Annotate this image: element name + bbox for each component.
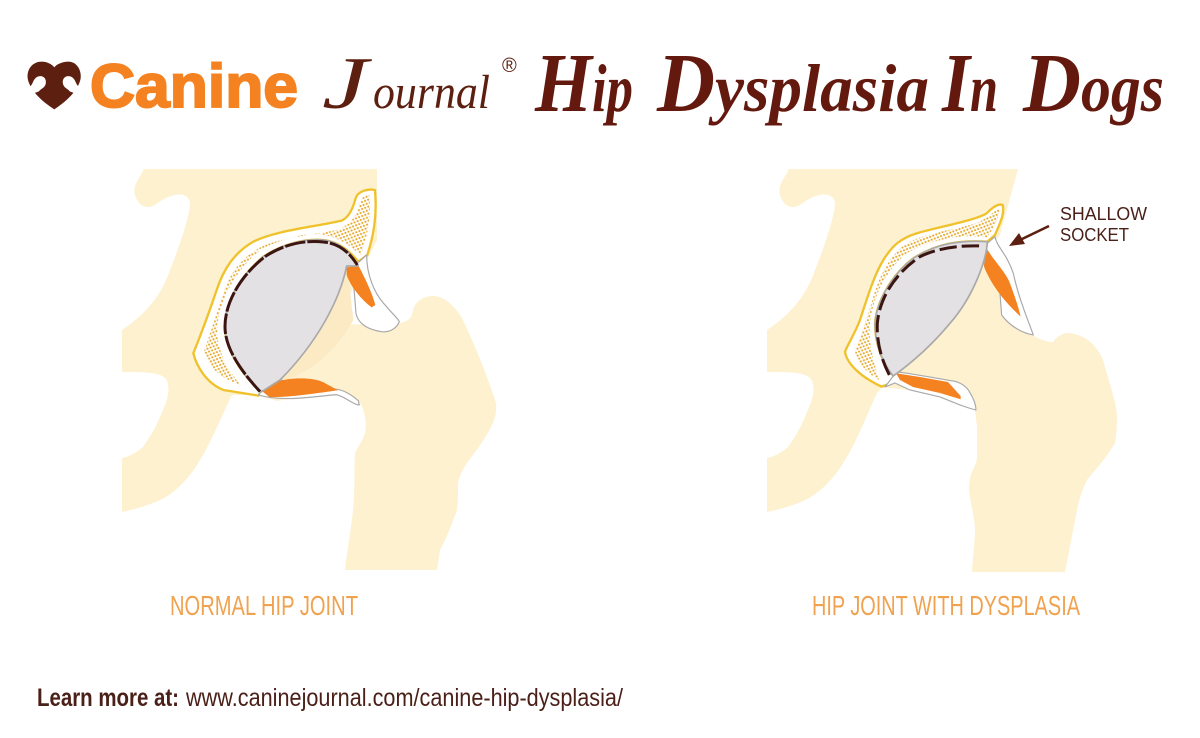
callout: shallow socket: SHALLOW [1060,204,1147,224]
socket and joint detail [845,205,1033,410]
label: hip joint with dysplasia: HIP JOINT WITH DYSPLASIA [812,590,1080,621]
callout: shallow socket [1060,204,1147,245]
orange upper ligament [984,248,1021,317]
orange lower ligament [263,378,338,397]
logo [28,43,517,125]
femoral head [875,241,987,376]
panel: hip joint with dysplasia [767,169,1117,572]
upper capsule [347,255,399,332]
title: ip [592,50,633,126]
orange lower ligament [896,373,961,399]
footer link text [37,684,623,712]
lower capsule [258,380,359,405]
acetabulum cartilage outline [845,205,1003,387]
logo word: Journal: ournal [373,66,490,119]
title: n [970,50,998,126]
footer link text: Learn more at: [37,684,179,712]
registered mark: ® [502,55,517,77]
upper capsule [984,237,1033,335]
arrow: shallow socket [1009,226,1049,246]
femoral head shadow [280,267,353,380]
lower capsule [885,372,976,410]
pelvis bone [122,169,377,512]
orange upper ligament [347,265,375,307]
socket and joint detail [193,190,399,405]
femoral head [225,240,358,392]
label: normal hip joint: NORMAL HIP JOINT [170,590,358,621]
dashed cartilage line [877,246,982,375]
title: D [656,37,715,130]
femur bone [258,296,496,570]
title: ysplasia [708,50,929,126]
title: ogs [1081,50,1164,126]
stippled bone [855,208,999,380]
acetabulum cartilage outline [193,190,376,396]
footer link text: www.caninejournal.com/canine-hip-dysplasia/ [185,684,623,712]
dashed cartilage line [225,241,357,392]
icon: heart dog face [28,62,81,109]
title: D [1022,37,1081,130]
stippled bone [204,195,370,385]
logo word: Canine: Canine [90,52,298,120]
femur bone [880,250,1117,572]
pelvis bone [767,169,1018,512]
title: I [941,37,973,130]
callout: shallow socket: SOCKET [1060,225,1129,245]
panel: normal hip joint [122,169,496,570]
title: H [534,37,594,130]
logo word: Journal: J [322,43,372,125]
